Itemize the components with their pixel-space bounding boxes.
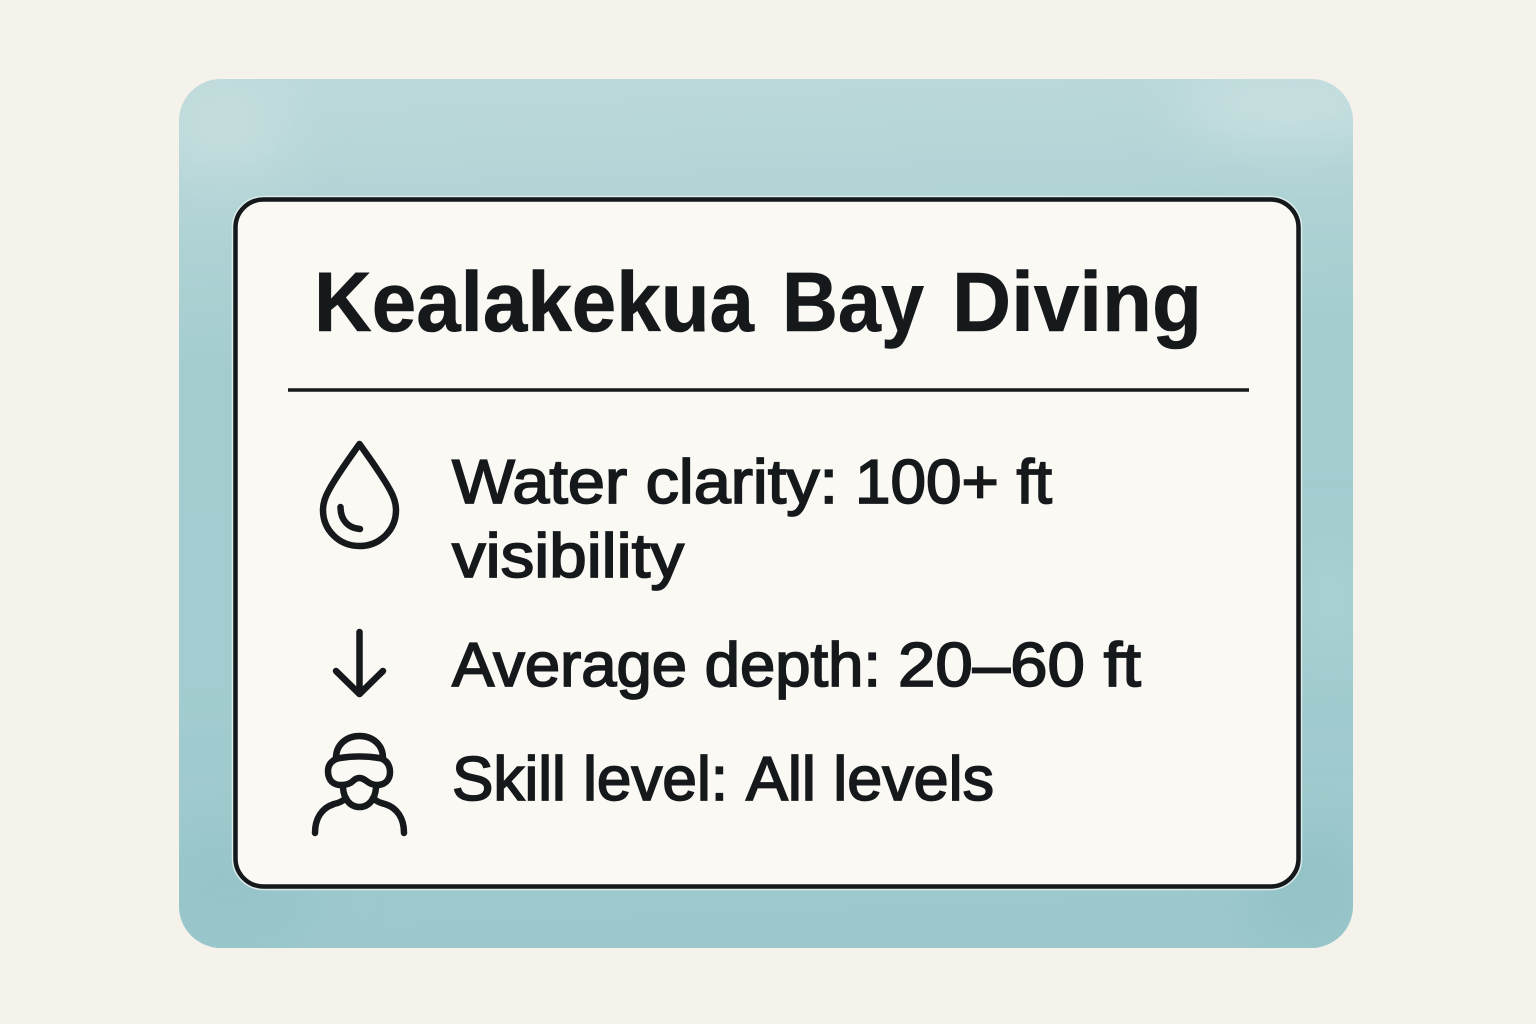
average depth text: 20–60 ft	[898, 631, 1141, 700]
icon: diver with mask	[315, 736, 404, 833]
skill level text: Skill level:	[452, 745, 728, 814]
skill level text: All levels	[746, 745, 994, 814]
average depth text	[452, 631, 1141, 700]
panel: teal background	[140, 75, 1400, 950]
title: Diving	[952, 255, 1202, 349]
water clarity text continued: visibility	[452, 522, 684, 591]
icon: water drop	[323, 444, 396, 546]
skill level text	[452, 745, 994, 814]
icon: down arrow	[336, 632, 383, 694]
panel: info card	[232, 196, 1302, 890]
title: Bay	[782, 255, 924, 349]
water clarity text: Water clarity:	[452, 448, 838, 517]
title	[314, 255, 1202, 349]
average depth text: Average depth:	[452, 631, 881, 700]
water clarity text	[452, 448, 1052, 517]
infographic	[179, 79, 1353, 948]
water clarity text: 100+ ft	[855, 448, 1052, 517]
title: Kealakekua	[314, 255, 755, 349]
